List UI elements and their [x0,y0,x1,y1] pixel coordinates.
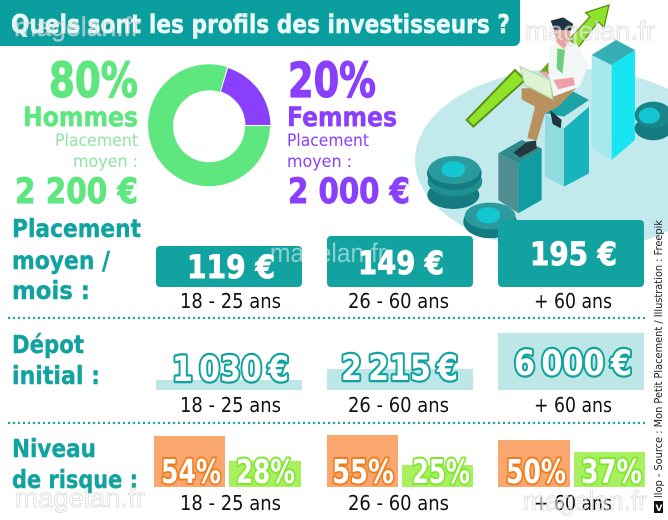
initial deposit 18-25 [156,350,302,417]
monthly placement 60+: 195 € [530,235,617,273]
men block [15,53,138,212]
monthly placement 18-25: 119 € [187,248,275,286]
men block: moyen : [73,152,138,172]
heading: niveau de risque: Niveau [12,434,96,463]
women block [287,53,410,212]
monthly placement 60+: + 60 ans [534,289,612,313]
initial deposit 60+ [498,333,644,417]
women block: Placement [287,131,369,151]
illustration: investor sitting on rising bars [415,5,668,252]
initial deposit 60+: 6 000 € [514,344,632,384]
men block: Hommes [23,102,138,133]
donut chart [148,64,270,186]
heading: placement moyen par mois: moyen / [12,246,111,275]
initial deposit 26-60: 2 215 € [341,349,458,389]
watermarks: magelan.fr [523,486,647,516]
monthly placement 26-60 [327,236,473,313]
monthly placement 26-60: 149 € [358,244,444,282]
icon: coin stack bottom [463,203,517,238]
monthly placement 18-25: 18 - 25 ans [180,289,281,313]
risk 18-25: 28% [236,452,295,491]
heading: niveau de risque [12,434,138,494]
person [513,17,588,157]
heading: dépôt initial: initial : [12,361,100,390]
men block: 80% [49,53,138,109]
watermarks: magelan.fr [270,238,386,268]
men block: 2 200 € [15,172,138,212]
initial deposit 60+: + 60 ans [534,393,612,417]
icon: coin stack left [427,156,482,209]
risk 26-60: 55% [332,452,394,491]
title banner [0,0,520,46]
risk 18-25: 54% [161,452,221,491]
source credit: V [656,504,662,514]
heading: placement moyen par mois: mois : [12,276,90,305]
monthly placement 60+ [498,220,644,313]
risk 26-60: 26 - 60 ans [348,491,449,515]
risk 26-60: 25% [412,452,470,491]
watermarks: magelan.fr [15,483,145,513]
heading: dépôt initial: Dépot [12,330,84,359]
icon: coin stack right [635,102,668,140]
heading: placement moyen par mois [12,214,141,305]
watermarks: magelan.fr [14,12,140,42]
monthly placement 26-60: 26 - 60 ans [348,289,449,313]
risk 18-25: 18 - 25 ans [180,491,281,515]
initial deposit 18-25: 18 - 25 ans [180,393,281,417]
initial deposit 26-60: 26 - 60 ans [348,393,449,417]
risk 60+: + 60 ans [534,491,612,515]
risk 18-25 [154,436,301,515]
women block: Femmes [287,102,397,133]
risk 26-60 [327,435,473,515]
initial deposit 18-25: 1 030 € [172,350,289,390]
heading: dépôt initial [12,330,100,390]
risk 60+ [498,440,645,515]
monthly placement 18-25 [156,246,302,313]
source credit: llop - Source : Mon Petit Placement / Illustration : Freepik [652,219,665,498]
watermarks: magelan.fr [525,16,655,46]
women block: 20% [288,53,376,109]
risk 60+: 37% [581,452,642,491]
title banner: Quels sont les profils des investisseurs ? [11,10,510,40]
initial deposit 26-60 [327,349,473,417]
bar 2 [545,92,589,187]
bar 3 [592,40,635,160]
risk 60+: 50% [506,452,566,491]
women block: 2 000 € [288,172,410,212]
heading: placement moyen par mois: Placement [12,214,141,243]
men block: Placement [55,131,138,151]
heading: niveau de risque: de risque : [12,465,138,494]
bar 1 [498,140,542,213]
women block: moyen : [287,152,352,172]
